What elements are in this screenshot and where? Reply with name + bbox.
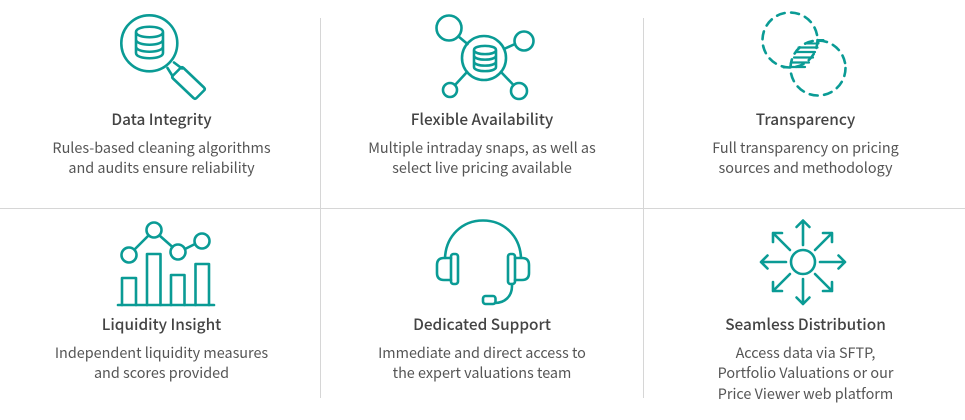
heading: Transparency: Transparency bbox=[756, 108, 855, 130]
icon: bar chart with line bbox=[118, 222, 214, 305]
text: Seamless Distribution description: Price Viewer web platform bbox=[718, 382, 893, 404]
icon: magnifier with database bbox=[121, 15, 205, 99]
icon: network with database bbox=[436, 16, 534, 99]
text: Transparency description bbox=[712, 136, 899, 178]
text: Flexible Availability description bbox=[368, 136, 596, 178]
text: Data Integrity description bbox=[52, 136, 271, 178]
text: Dedicated Support description: the expert valuations team bbox=[393, 362, 571, 383]
heading: Data Integrity: Data Integrity bbox=[111, 108, 212, 130]
text: Seamless Distribution description bbox=[718, 342, 894, 404]
text: Data Integrity description: and audits ensure reliability bbox=[68, 157, 255, 178]
text: Liquidity Insight description bbox=[55, 342, 268, 383]
text: Transparency description: sources and methodology bbox=[719, 157, 892, 178]
icon: headset bbox=[437, 220, 529, 304]
text: Transparency description: Full transparency on pricing bbox=[712, 136, 899, 158]
heading: Flexible Availability: Flexible Availability bbox=[411, 108, 553, 130]
text: Data Integrity description: Rules-based cleaning algorithms bbox=[52, 136, 271, 158]
text: Dedicated Support description bbox=[378, 342, 586, 383]
icon: overlapping dashed circles bbox=[762, 12, 846, 96]
text: Dedicated Support description: Immediate and direct access to bbox=[378, 342, 586, 362]
text: Flexible Availability description: Multiple intraday snaps, as well as bbox=[368, 136, 596, 158]
icon: arrows radiating from circle bbox=[761, 220, 845, 304]
heading: Dedicated Support: Dedicated Support bbox=[413, 313, 551, 335]
text: Flexible Availability description: select live pricing available bbox=[392, 157, 572, 178]
heading: Seamless Distribution: Seamless Distribution bbox=[725, 313, 886, 335]
text: Liquidity Insight description: and scores provided bbox=[94, 362, 229, 383]
text: Seamless Distribution description: Access data via SFTP, bbox=[736, 342, 875, 362]
text: Liquidity Insight description: Independent liquidity measures bbox=[55, 342, 268, 362]
heading: Liquidity Insight: Liquidity Insight bbox=[102, 313, 221, 335]
text: Seamless Distribution description: Portfolio Valuations or our bbox=[718, 362, 893, 383]
